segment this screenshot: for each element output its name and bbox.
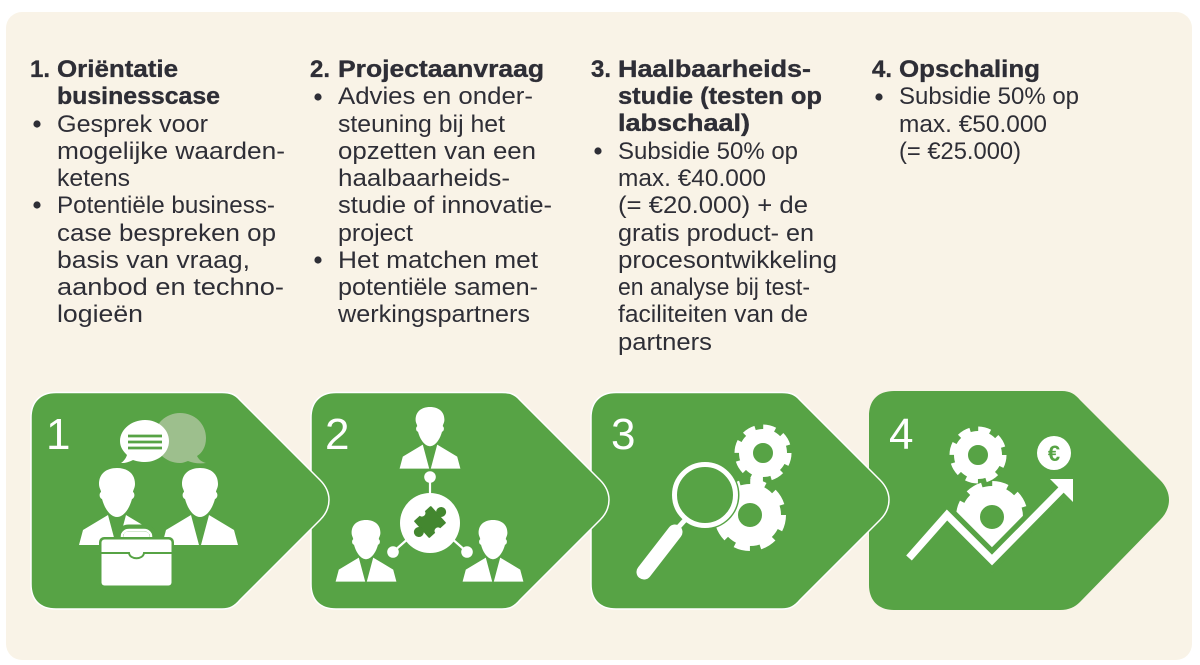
number 1: 1 [46, 410, 70, 459]
bullet list step 2: Het matchen met [338, 247, 538, 274]
bullet list step 2: haalbaarheids- [338, 165, 510, 192]
bullet list step 2: studie of innovatie- [338, 192, 552, 219]
network connectors [393, 477, 467, 552]
icon: two people with speech bubbles and briefcase [79, 413, 238, 588]
gear bottom [718, 483, 782, 547]
bullet list step 2: project [338, 220, 413, 247]
hub circle with puzzle piece [400, 493, 460, 553]
heading step 2: Projectaanvraag [338, 56, 544, 83]
person top [400, 407, 460, 469]
bullet list step 1: ketens [57, 165, 130, 192]
bullet list step 1: Gesprek voor [57, 111, 208, 138]
heading step 3: Haalbaarheids- [618, 56, 811, 83]
rising arrow [909, 479, 1073, 560]
bullet list step 1: logieën [57, 301, 143, 328]
column 4: Opschaling [872, 56, 1079, 165]
bullet list step 2: opzetten van een [338, 138, 536, 165]
bullet list step 2: Advies en onder- [338, 83, 533, 110]
bullet list step 2: potentiële samen- [338, 274, 538, 301]
bullet list step 1: basis van vraag, [57, 247, 250, 274]
bullet list step 2 [314, 83, 552, 328]
person bottom left [336, 520, 396, 582]
heading step 3: labschaal) [618, 110, 750, 137]
bullet list step 4: (= €25.000) [899, 138, 1021, 165]
bullet list step 4 [875, 83, 1079, 165]
heading step 4: Opschaling [899, 56, 1040, 83]
white speech bubble [120, 420, 169, 463]
bullet list step 3 [594, 138, 837, 356]
bullet list step 1: mogelijke waarden- [57, 138, 285, 165]
euro coin: € [1048, 441, 1060, 466]
bullet list step 1: Potentiële business- [57, 192, 275, 219]
heading step 1: businesscase [57, 83, 220, 110]
number 2: 2 [325, 410, 349, 459]
arrow panel 4 [869, 391, 1169, 610]
heading step 3: 3. [591, 56, 611, 83]
heading step 4: 4. [872, 56, 892, 83]
person bottom right [463, 520, 523, 582]
arrow panel 3 [591, 392, 889, 609]
gear bottom [960, 485, 1024, 549]
person left [79, 468, 155, 545]
bullet list step 1: case bespreken op [57, 220, 276, 247]
bullet list step 3: max. €40.000 [618, 165, 766, 192]
bullet list step 2: werkingspartners [337, 301, 530, 328]
number 3: 3 [611, 410, 635, 459]
heading step 1 [30, 56, 220, 110]
number 4: 4 [889, 410, 913, 459]
right node [461, 546, 473, 558]
bullet list step 1 [33, 111, 285, 328]
bullet list step 2: steuning bij het [338, 111, 505, 138]
heading step 2: 2. [310, 56, 330, 83]
bullet list step 3: faciliteiten van de [618, 301, 808, 328]
bullet list step 1: aanbod en techno- [57, 274, 284, 301]
bullet list step 3: Subsidie 50% op [618, 138, 798, 165]
bullet list step 3: gratis product- en [618, 220, 814, 247]
magnifying glass [644, 460, 740, 572]
gear top [952, 430, 1004, 480]
top node [424, 471, 436, 483]
heading step 1: 1. [30, 56, 50, 83]
bullet list step 3: en analyse bij test- [618, 274, 810, 301]
column 1: Oriëntatie businesscase [30, 56, 285, 328]
icon: gears, rising arrow and euro coin [909, 430, 1073, 560]
pale speech bubble [154, 413, 206, 463]
arrow panel 1 [31, 392, 329, 609]
heading step 3: studie (testen op [618, 83, 822, 110]
column 3: Haalbaarheidsstudie [591, 56, 837, 356]
briefcase [99, 528, 174, 588]
heading step 3 [591, 56, 822, 137]
icon: three people around a puzzle piece [336, 407, 523, 582]
bullet list step 3: partners [618, 329, 712, 356]
bullet list step 4: Subsidie 50% op [899, 83, 1079, 110]
gear top [738, 428, 788, 478]
icon: magnifier and gears [644, 428, 788, 572]
person right [162, 468, 238, 545]
heading step 1: Oriëntatie [57, 56, 178, 83]
bullet list step 3: procesontwikkeling [618, 247, 837, 274]
bullet list step 4: max. €50.000 [899, 111, 1047, 138]
euro coin [1037, 436, 1071, 470]
column 2: Projectaanvraag [310, 56, 552, 328]
bullet list step 3: (= €20.000) + de [618, 192, 808, 219]
left node [387, 546, 399, 558]
gear cut-out [947, 488, 1063, 560]
arrow panel 2 [311, 392, 609, 609]
